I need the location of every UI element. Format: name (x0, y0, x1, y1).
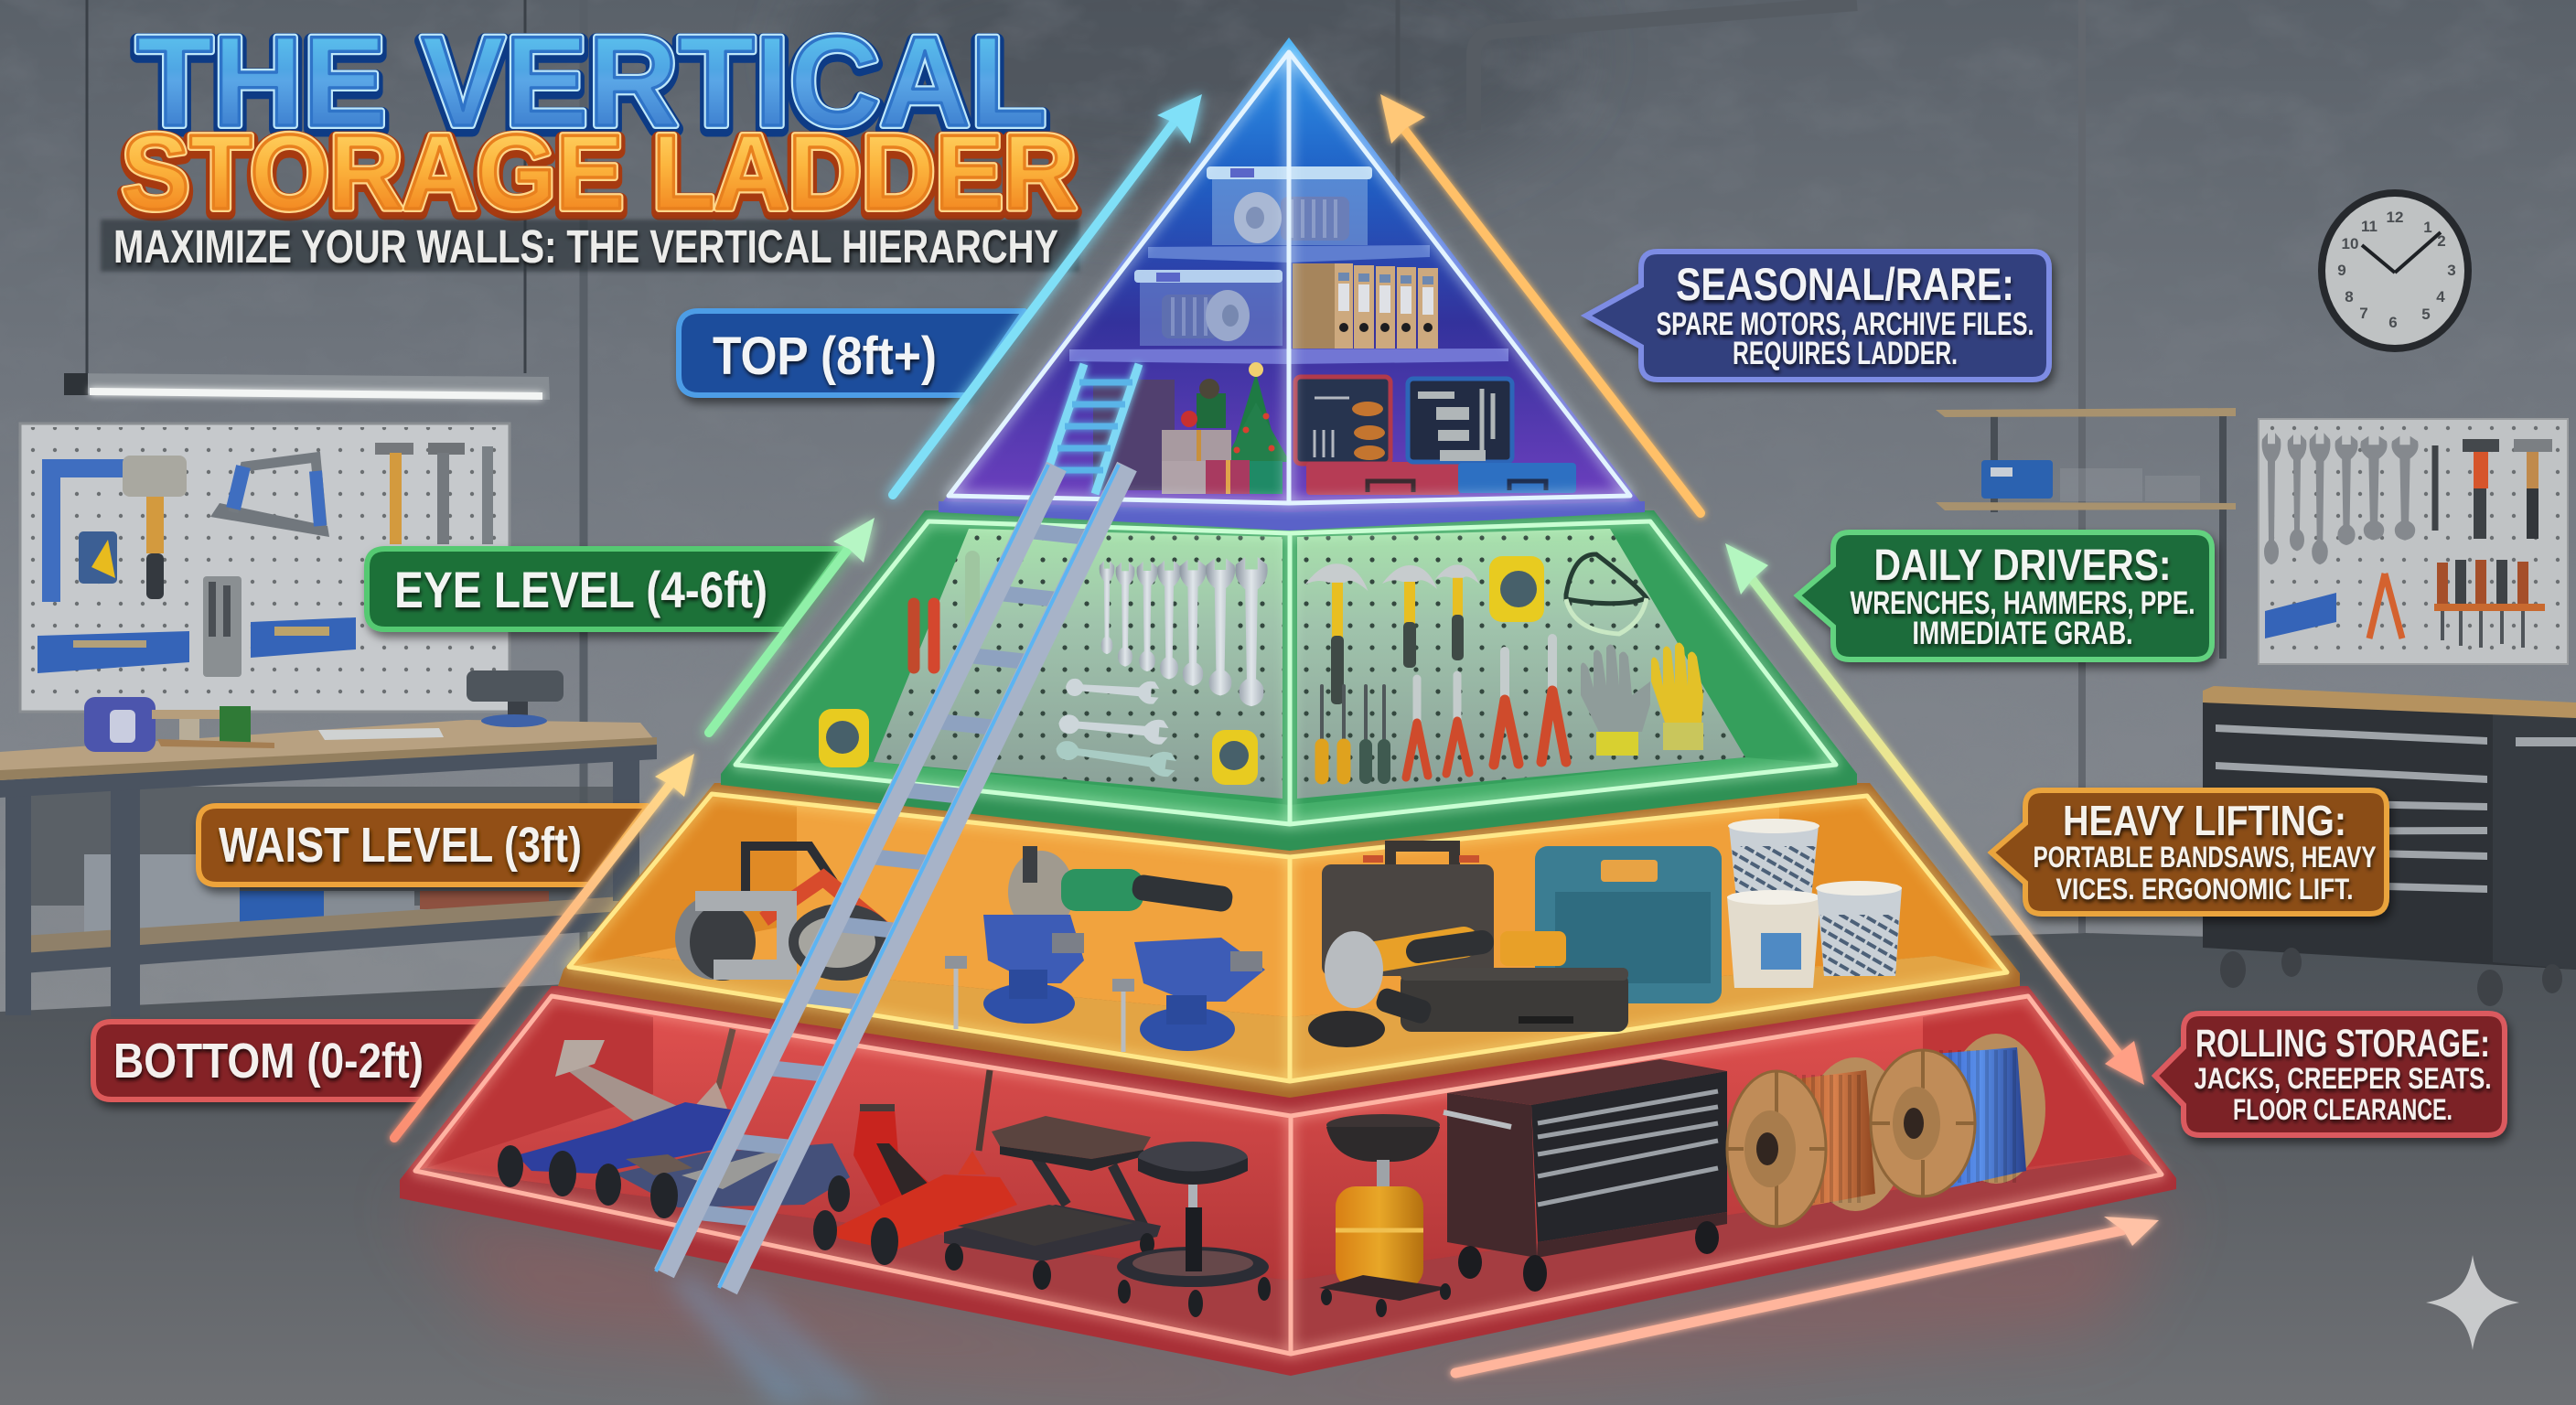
title line: storage ladder: STORAGE LADDER (122, 113, 1077, 231)
blue floor jacks (498, 1029, 850, 1218)
arrow: left blue up (893, 94, 1202, 495)
angle grinder (1308, 931, 1566, 1047)
callout: seasonal rare (1586, 252, 2049, 380)
label: bottom (93, 1022, 481, 1099)
hacksaw (210, 457, 329, 537)
wall clock: 3 (2447, 262, 2456, 279)
work gloves (1581, 642, 1703, 756)
rolling stool (1117, 1142, 1271, 1317)
tool holder (203, 576, 242, 677)
floor (0, 933, 2576, 1405)
callout: daily drivers: WRENCHES, HAMMERS, PPE. (1850, 585, 2195, 621)
watermark sparkle icon (2426, 1255, 2519, 1350)
hammers (375, 443, 488, 544)
label: bottom: BOTTOM (0-2ft) (113, 1034, 424, 1089)
bench top (0, 720, 657, 780)
neon outline (569, 794, 2007, 1081)
horizontal wrenches (1055, 675, 1177, 778)
handle and cone (718, 1029, 733, 1089)
wall clock: 10 (2342, 235, 2358, 252)
gift boxes (1162, 379, 1283, 494)
callout: seasonal rare: SPARE MOTORS, ARCHIVE FILES. (1656, 306, 2034, 342)
items on bench (84, 697, 444, 752)
plastic bin with motor lower (1134, 270, 1283, 346)
chest wheels (2220, 948, 2562, 1006)
left wall (415, 996, 1291, 1281)
wall clock: 7 (2359, 305, 2368, 322)
wall clock: 6 (2388, 314, 2398, 331)
copper cable spool (1727, 1057, 1906, 1227)
open red tool case (1295, 377, 1460, 495)
floor (569, 956, 2007, 1081)
oil drain tank (1319, 1114, 1451, 1317)
left workbench with bins (0, 670, 657, 1017)
callout: daily drivers (1798, 532, 2212, 660)
yellow hand tool (79, 531, 117, 584)
pyramid tier: waist orange (558, 783, 2020, 1098)
red handled tool (2463, 439, 2499, 539)
floor glow reflections (400, 1194, 2176, 1405)
arrow: left green up (709, 518, 875, 733)
tall aluminium ladder (656, 465, 1127, 1290)
callout: heavy lifting: HEAVY LIFTING: (2063, 797, 2346, 844)
short neon ladder in top tier (1038, 364, 1139, 499)
callout: rolling storage (2155, 1014, 2505, 1135)
wall clock (2318, 189, 2472, 352)
yellow tape measures (819, 556, 1544, 785)
right wall (1291, 996, 2162, 1281)
left hanging light fixture (64, 0, 550, 400)
stored box behind ladder (1093, 380, 1175, 490)
blue cable spool (1871, 1034, 2045, 1196)
screw buckets (1727, 819, 1902, 988)
bins on lower shelf (84, 854, 549, 943)
title line: the vertical: THE VERTICAL (136, 9, 1046, 153)
blue bench vise one (945, 915, 1084, 1029)
right pegboard wall (1297, 529, 1745, 799)
right tool chest (2203, 686, 2576, 1006)
red floor jack (813, 1070, 1017, 1265)
dark tool case (1322, 846, 1494, 976)
wall clock: 8 (2345, 288, 2354, 306)
arrow: left orange up (394, 754, 694, 1138)
pliers (1406, 638, 1566, 778)
front jack body (517, 1102, 731, 1174)
wall clock: 5 (2421, 306, 2431, 323)
hanging wrenches (1100, 557, 1268, 706)
middle shelf (1069, 349, 1508, 364)
archive binders (1293, 263, 1438, 349)
lift arm and pad (559, 1064, 685, 1128)
blue bench vise two (1112, 938, 1265, 1052)
left pegboard with tools (20, 424, 510, 712)
upper shelf (1148, 245, 1430, 263)
rungs (694, 531, 1092, 1219)
right wall shelves (1936, 408, 2236, 659)
mallet (123, 456, 187, 599)
bench frame (0, 739, 657, 1017)
christmas tree (1224, 362, 1290, 462)
neon outline (415, 996, 2162, 1354)
hammers (1304, 563, 1479, 704)
wall seams and pipes (584, 0, 2082, 970)
callout: seasonal rare: REQUIRES LADDER. (1733, 336, 1958, 371)
green angle grinder (1008, 846, 1234, 933)
rails (656, 465, 1127, 1290)
wall clock: 2 (2437, 232, 2446, 250)
callout: rolling storage: JACKS, CREEPER SEATS. (2194, 1062, 2492, 1095)
floor (415, 1154, 2162, 1354)
bandsaw (675, 846, 895, 981)
safety glasses (1566, 554, 1647, 634)
cordless drill (467, 670, 564, 727)
title line: storage ladder: STORAGE LADDER (122, 113, 1077, 231)
wall clock: 11 (2361, 218, 2377, 235)
arrow: right orange top (1380, 94, 1701, 513)
callout: seasonal rare: SEASONAL/RARE: (1676, 259, 2014, 310)
wall clock: 9 (2337, 262, 2346, 279)
blue parts bins (38, 617, 356, 673)
wall clock: 1 (2423, 219, 2432, 236)
title (101, 9, 1079, 273)
label: eye level (367, 549, 843, 629)
plastic bin with motor top (1207, 166, 1372, 245)
callout: heavy lifting: VICES. ERGONOMIC LIFT. (2056, 873, 2353, 906)
back walls (569, 794, 1290, 1017)
subtitle band: MAXIMIZE YOUR WALLS: THE VERTICAL HIERARCHY (113, 220, 1058, 273)
hammer (2514, 439, 2552, 539)
label: top 8ft+: TOP (8ft+) (713, 327, 937, 386)
wrenches (2262, 433, 2419, 564)
callout: rolling storage: FLOOR CLEARANCE. (2233, 1093, 2453, 1126)
arrow: right green to red (1725, 543, 2144, 1085)
left pegboard wall (874, 529, 1283, 799)
rolling tool chest (1444, 1059, 1727, 1292)
wall clock: 12 (2387, 209, 2403, 226)
rear jack body (615, 1143, 850, 1207)
blue bin (2265, 593, 2336, 638)
callout: heavy lifting: PORTABLE BANDSAWS, HEAVY (2033, 841, 2377, 874)
screwdrivers (1322, 686, 1384, 778)
neon outline (735, 521, 1836, 824)
label: waist level: WAIST LEVEL (3ft) (219, 818, 582, 873)
lower dark case (1401, 968, 1628, 1032)
pliers (2369, 574, 2402, 638)
callout: heavy lifting (1991, 790, 2387, 914)
open blue tool case (1408, 379, 1576, 493)
label: waist level (199, 806, 648, 885)
blue frame tool (51, 468, 128, 602)
label: eye level: EYE LEVEL (4-6ft) (394, 561, 767, 618)
teal tool case (1535, 846, 1722, 1003)
screwdriver rack (2434, 560, 2545, 648)
arrow: bottom right (1455, 1217, 2159, 1373)
title line: storage ladder: STORAGE LADDER (122, 116, 1077, 235)
label: top 8ft+ (679, 311, 1025, 395)
callout: daily drivers: DAILY DRIVERS: (1873, 542, 2172, 590)
title line: the vertical: THE VERTICAL (136, 13, 1046, 156)
pyramid tier: eye level green (721, 510, 1857, 851)
neon outline (949, 52, 1630, 503)
pyramid tier: top blue purple (939, 38, 1645, 531)
lower shelf (23, 896, 622, 960)
right pegboard with tools (2259, 419, 2568, 664)
pyramid tier: bottom red (400, 986, 2176, 1376)
creeper seat (944, 1116, 1161, 1290)
title line: the vertical: THE VERTICAL (136, 9, 1046, 153)
callout: daily drivers: IMMEDIATE GRAB. (1912, 616, 2133, 651)
red screwdrivers (914, 558, 972, 668)
wall clock: 4 (2436, 288, 2445, 306)
